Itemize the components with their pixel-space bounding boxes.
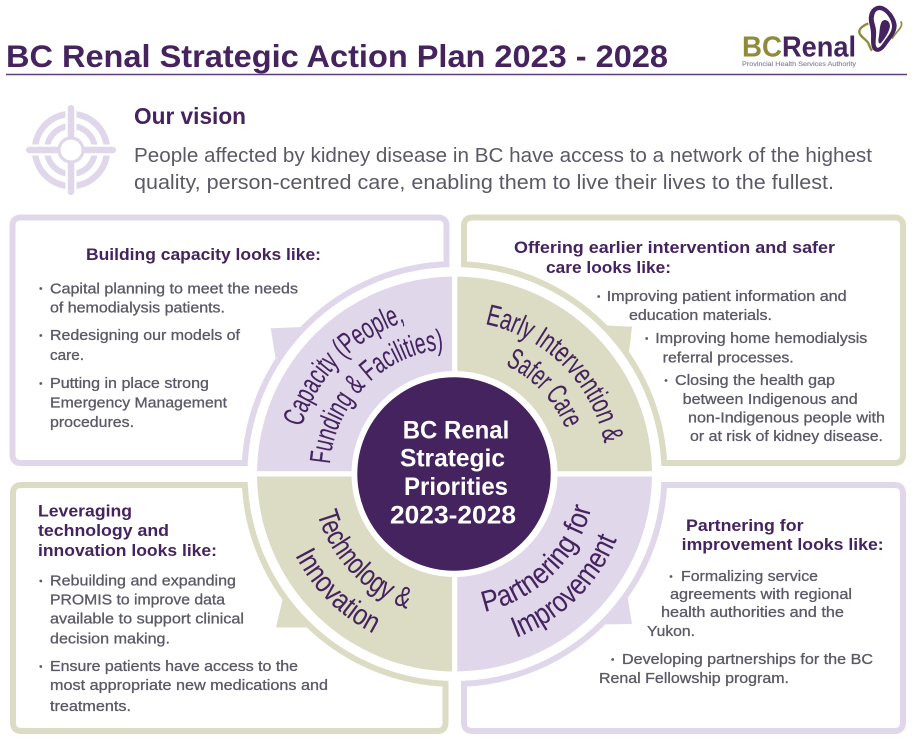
curved label: capacity: Capacity (People, [284,308,404,424]
arrow pointer [276,599,308,628]
heading: our vision: Our vision [134,103,246,129]
bullet list: Formalizing service [681,568,818,585]
bullet list: agreements with regional [670,586,852,603]
panel: partnering for improvement [464,485,903,731]
curved label: technology: Technology & [319,508,410,609]
panel heading [682,517,884,554]
bullet list: or at risk of kidney disease. [690,428,883,445]
priority wheel [257,276,652,672]
panel: leveraging technology [13,485,446,731]
bullet list: Improving patient information and [607,288,847,305]
bullet list [599,568,873,687]
centre text: Strategic [400,445,505,473]
logo: BC Renal [742,6,902,68]
panel heading: Leveraging [38,503,132,521]
panel heading: Building capacity looks like: [86,246,321,264]
bullet list: procedures. [50,414,134,431]
centre text: 2023-2028 [390,501,516,529]
bullet list: Rebuilding and expanding [50,573,236,590]
bullet list: Closing the health gap [675,372,835,389]
bullet list: decision making. [50,630,170,647]
bullet list: Ensure patients have access to the [50,658,298,675]
curved label: partnering: Improvement [510,534,617,638]
panel frame [13,485,446,731]
bullet list: treatments. [50,698,131,715]
curved label: technology: Innovation [296,548,378,633]
icon: ear logo mark [859,6,902,52]
centre text: BC Renal [403,416,509,444]
bullet list: Putting in place strong [50,375,209,392]
centre text: Priorities [404,473,508,501]
bullet list: between Indigenous and [683,391,858,408]
bullet list: Yukon. [647,623,695,640]
panel heading: Partnering for [686,517,804,535]
bullet list: Redesigning our models of [50,327,241,344]
centre text [390,416,516,529]
logo wordmark: Renal [782,32,856,64]
quadrant: partnering [454,474,652,672]
bullet list [39,280,298,431]
centre circle [357,377,551,571]
bullet list: care. [50,347,84,364]
logo tagline: Provincial Health Services Authority [742,61,857,68]
panel heading: innovation looks like: [38,542,217,560]
vision statement: People affected by kidney disease in BC have access to a network of the highest [134,145,872,167]
bullet list: most appropriate new medications and [50,677,328,694]
bullet list: health authorities and the [661,604,844,621]
bullet list: Renal Fellowship program. [599,670,789,687]
bullet list: Developing partnerships for the BC [622,651,873,668]
panel heading: technology and [38,522,169,540]
logo wordmark: BC [742,32,782,64]
panel heading [514,239,836,277]
bullet list: of hemodialysis patients. [50,299,225,316]
arrow pointer [602,598,632,624]
curved label: early intervention: Early Intervention & [486,304,623,444]
vision statement [134,145,872,194]
quadrant: capacity [257,276,454,474]
quadrant: early intervention [454,276,652,474]
panel heading [38,503,217,560]
bullet list: referral processes. [663,349,794,366]
panel heading: Offering earlier intervention and safer [514,239,836,257]
curved label: capacity: Funding & Facilities) [310,328,442,463]
bullet list: PROMIS to improve data [50,591,226,608]
quadrant: technology [257,474,454,672]
panel heading: improvement looks like: [682,536,884,554]
arrow pointer [271,327,303,358]
bullet list [39,573,328,715]
panel: earlier intervention [464,218,903,463]
curved label: partnering: Partnering for [481,504,590,612]
bullet list [597,288,885,445]
panel frame [12,218,446,463]
panel: building capacity [12,218,446,463]
title: BC Renal Strategic Action Plan 2023 - 2028 [6,38,668,74]
panel frame [464,485,903,731]
panel heading: care looks like: [546,259,671,277]
bullet list: education materials. [629,307,772,324]
panel frame [464,218,903,463]
logo wordmark [742,32,856,64]
bullet list: Emergency Management [50,394,228,411]
bullet list: non-Indigenous people with [688,409,885,426]
icon: target [26,105,116,195]
arrow pointer [606,326,632,352]
curved label: early intervention: Safer Care [508,349,579,427]
bullet list: Improving home hemodialysis [655,330,867,347]
vision statement: quality, person-centred care, enabling them to live their lives to the fullest. [134,172,834,194]
bullet list: available to support clinical [50,610,244,627]
curved label: technology [296,508,410,633]
bullet list: Capital planning to meet the needs [50,280,298,297]
